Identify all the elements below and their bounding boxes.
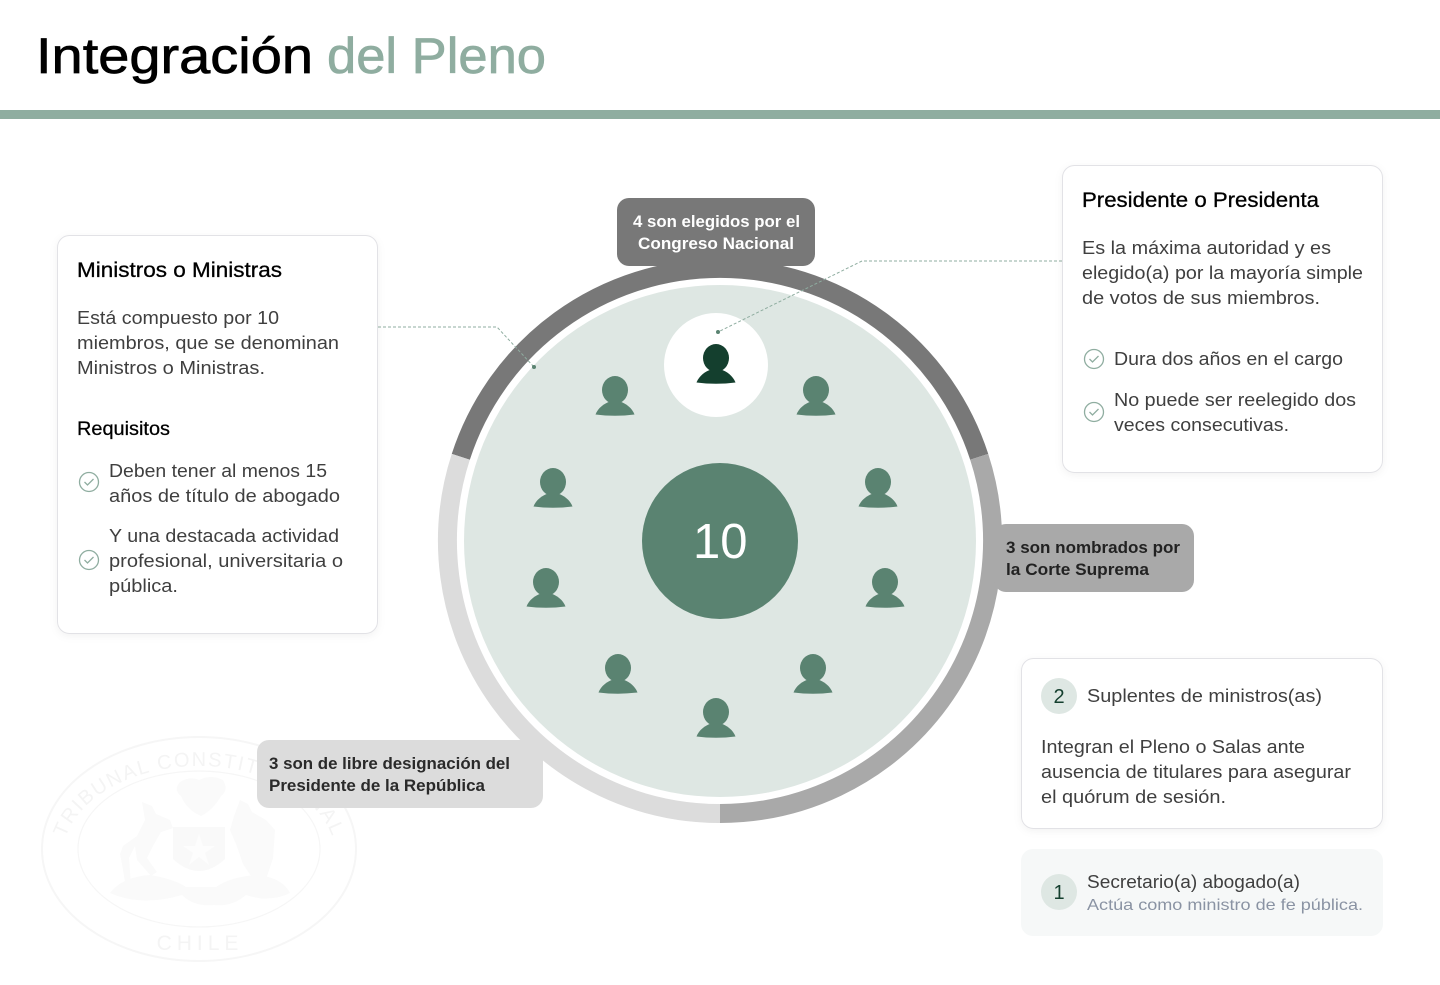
text: presidente description: de votos de sus miembros. xyxy=(1082,288,1320,308)
president highlight disc xyxy=(664,313,768,417)
icon: check xyxy=(80,550,98,570)
list item: reelección: veces consecutivas. xyxy=(1114,415,1289,435)
panel: ministros xyxy=(58,236,378,634)
text: ministros description xyxy=(77,308,339,378)
ring segment: Congreso Nacional xyxy=(461,268,979,457)
watermark: seal of Tribunal Constitucional: CHILE xyxy=(157,932,243,955)
badge: 2 xyxy=(1041,678,1077,714)
heading: requisitos: Requisitos xyxy=(77,419,170,440)
watermark: seal of Tribunal Constitucional: TRIBUNAL CONSTITUCIONAL xyxy=(53,752,342,836)
list item: título de abogado: Deben tener al menos 15 xyxy=(109,461,327,481)
icon: check xyxy=(1084,350,1104,368)
label: Presidente de la República: 3 son de libre designación del xyxy=(269,755,510,773)
heading: presidente: Presidente o Presidenta xyxy=(1082,189,1319,212)
badge: 2: 2 xyxy=(1053,686,1065,708)
watermark: seal of Tribunal Constitucional xyxy=(41,736,357,962)
ring segment: Presidente de la República xyxy=(447,457,720,814)
list item: duración: Dura dos años en el cargo xyxy=(1114,349,1343,369)
text: ministros description: Ministros o Ministras. xyxy=(77,358,265,378)
panel: secretario xyxy=(1021,849,1383,936)
label: Corte Suprema: 3 son nombrados por xyxy=(1006,539,1181,557)
label: Corte Suprema xyxy=(994,524,1194,592)
title: del Pleno xyxy=(327,28,546,84)
heading: suplentes: Suplentes de ministros(as) xyxy=(1087,686,1322,706)
center total: 10 xyxy=(693,515,748,569)
title: Integración xyxy=(36,28,313,84)
text: ministros description: miembros, que se denominan xyxy=(77,333,339,353)
text: suplentes description: Integran el Pleno o Salas ante xyxy=(1041,737,1305,757)
label: Congreso Nacional: Congreso Nacional xyxy=(638,235,794,253)
text: suplentes description xyxy=(1041,737,1351,807)
label: Presidente de la República xyxy=(257,740,543,808)
badge: 1 xyxy=(1041,874,1077,910)
connector: ministers card xyxy=(378,327,536,369)
list item: título de abogado xyxy=(109,461,340,506)
text: ministros description: Está compuesto por 10 xyxy=(77,308,279,328)
panel: presidente xyxy=(1062,166,1382,472)
heading: secretario: Secretario(a) abogado(a) xyxy=(1087,872,1300,892)
circle diagram xyxy=(447,268,993,814)
center total xyxy=(642,463,798,619)
list item: actividad destacada xyxy=(109,526,343,596)
text: presidente description: Es la máxima autoridad y es xyxy=(1082,238,1331,258)
text: presidente description xyxy=(1082,238,1363,308)
text: suplentes description: ausencia de titulares para asegurar xyxy=(1041,762,1351,782)
header rule xyxy=(0,110,1440,119)
list item: actividad destacada: pública. xyxy=(109,576,178,596)
list item: reelección: No puede ser reelegido dos xyxy=(1114,390,1356,410)
text: suplentes description: el quórum de sesión. xyxy=(1041,787,1226,807)
list item: actividad destacada: Y una destacada actividad xyxy=(109,526,339,546)
label: Corte Suprema: la Corte Suprema xyxy=(1006,561,1150,579)
badge: 1: 1 xyxy=(1053,882,1065,904)
text: secretario description: Actúa como ministro de fe pública. xyxy=(1087,897,1363,914)
connector: president card xyxy=(716,261,1062,334)
text: presidente description: elegido(a) por la mayoría simple xyxy=(1082,263,1363,283)
icon: check xyxy=(80,472,98,492)
list item: título de abogado: años de título de abogado xyxy=(109,486,340,506)
inner disc xyxy=(464,285,976,797)
icon: check xyxy=(1084,402,1104,422)
list item: actividad destacada: profesional, universitaria o xyxy=(109,551,343,571)
list item: reelección xyxy=(1114,390,1356,435)
heading: ministros: Ministros o Ministras xyxy=(77,259,282,282)
label: Congreso Nacional xyxy=(617,198,815,266)
person: president xyxy=(696,344,736,384)
ring segment: Corte Suprema xyxy=(720,457,993,814)
label: Presidente de la República: Presidente de la República xyxy=(269,777,486,795)
persons: ministers xyxy=(526,376,904,738)
panel: suplentes xyxy=(1022,658,1382,828)
label: Congreso Nacional: 4 son elegidos por el xyxy=(633,213,800,231)
title xyxy=(36,28,546,84)
